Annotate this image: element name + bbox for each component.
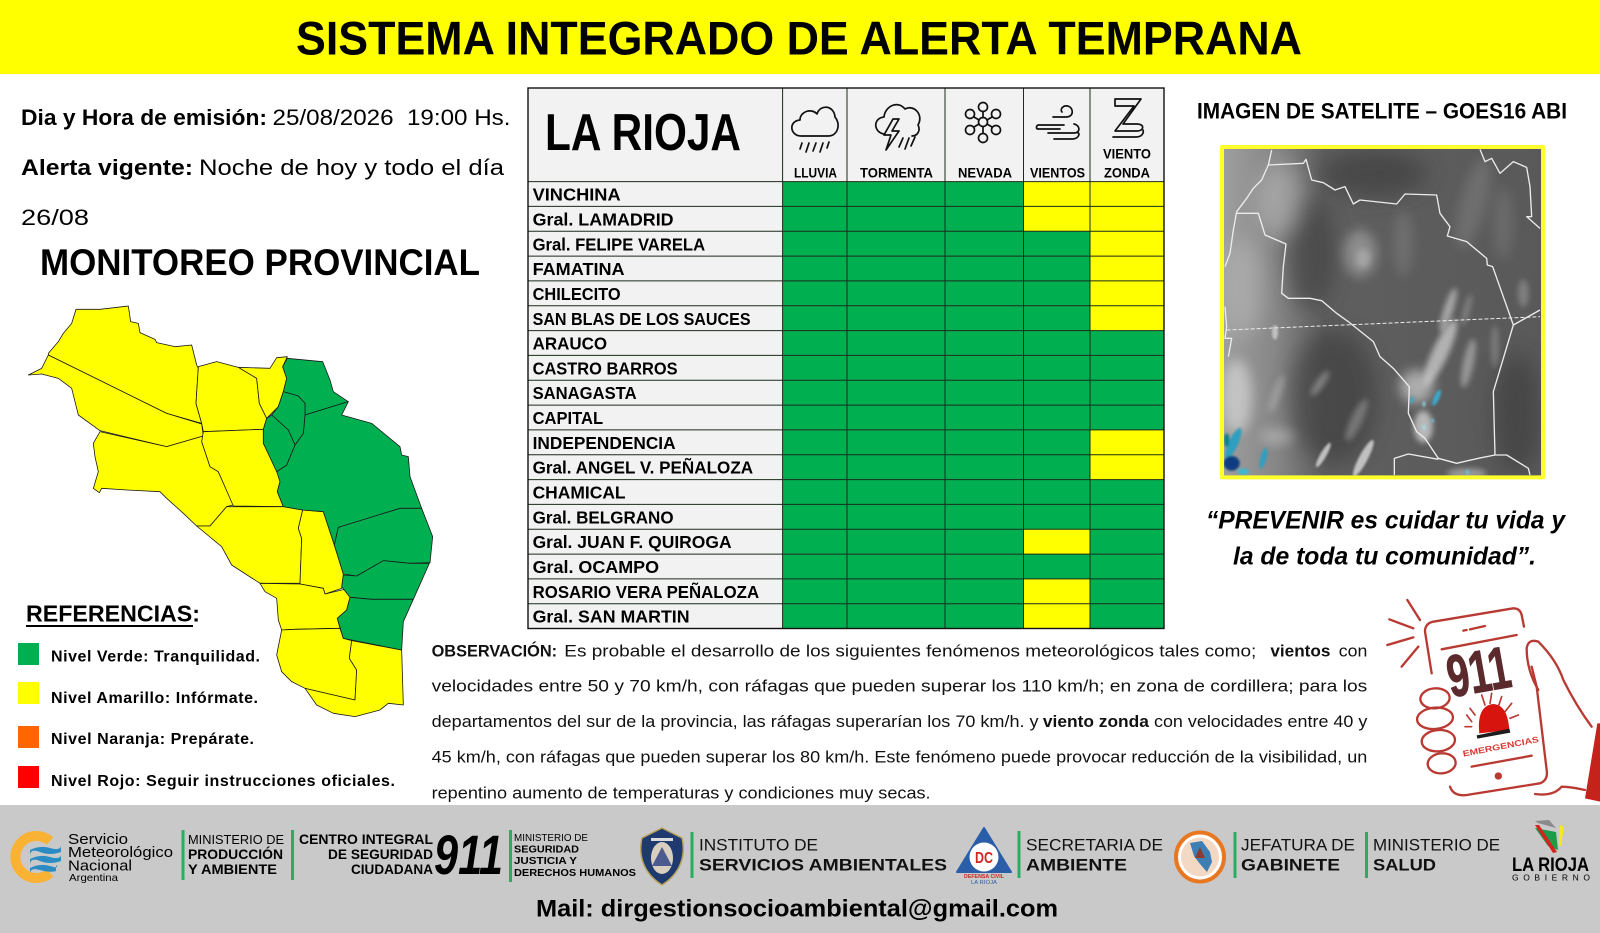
table header: ZONDA — [1104, 166, 1150, 180]
quote text: la de toda tu comunidad”. — [1233, 543, 1536, 571]
logo: ministerio de seguridad — [509, 830, 636, 882]
table header: LA RIOJA — [545, 104, 741, 162]
icon: 911 phone in hand — [1387, 600, 1600, 802]
logo: centro integral de seguridad ciudadana 911: CENTRO INTEGRAL — [299, 832, 433, 847]
row: Chamical — [528, 480, 1164, 504]
observation text: viento zonda — [1043, 713, 1150, 731]
logo: gobierno de la rioja — [1512, 820, 1590, 882]
logo: ministerio de seguridad: SEGURIDAD — [514, 844, 579, 856]
observation text: Es probable el desarrollo de los siguientes fenómenos meteorológicos tales como; — [564, 642, 1256, 660]
row: Famatina — [528, 256, 1164, 281]
row: Angel V. Peñaloza: Gral. ANGEL V. PEÑALOZA — [533, 457, 753, 478]
row: Lamadrid: Gral. LAMADRID — [533, 209, 674, 229]
icon: storm — [876, 105, 920, 150]
logo: ministerio de produccion y ambiente: PRODUCCIÓN — [188, 847, 283, 862]
icon: 911 phone in hand: 911 — [1442, 633, 1516, 710]
legend: referencias — [18, 600, 395, 790]
row: Juan F. Quiroga: Gral. JUAN F. QUIROGA — [533, 532, 732, 552]
legend: referencias: Nivel Naranja: Prepárate. — [51, 731, 254, 748]
table header: TORMENTA — [860, 166, 933, 180]
logo: defensa civil: DEFENSA CIVIL — [964, 874, 1005, 880]
legend: referencias: REFERENCIAS: — [26, 600, 200, 626]
icon: 911 phone in hand: EMERGENCIAS — [1462, 734, 1540, 759]
table header: VIENTO — [1103, 146, 1151, 162]
heading: monitoreo provincial: MONITOREO PROVINCIAL — [40, 242, 480, 283]
legend: referencias: Nivel Rojo: Seguir instrucciones oficiales. — [51, 773, 395, 790]
title banner: SISTEMA INTEGRADO DE ALERTA TEMPRANA — [296, 12, 1302, 64]
logo: servicio meteorologico nacional: Nacional — [68, 858, 132, 874]
row: Vinchina — [528, 182, 1164, 206]
legend: referencias: Nivel Verde: Tranquilidad. — [51, 648, 260, 666]
emission info text: 26/08 — [21, 205, 89, 230]
logo: secretaria de ambiente: AMBIENTE — [1026, 856, 1127, 874]
row: Independencia — [528, 430, 1164, 455]
logo: defensa civil — [957, 828, 1011, 886]
emission info text: Noche de hoy y todo el día — [199, 155, 505, 180]
icon: snowflakes — [966, 102, 1000, 142]
table header: LLUVIA — [794, 166, 837, 180]
table header: VIENTOS — [1030, 166, 1085, 180]
footer band — [0, 805, 1600, 933]
logo: centro integral de seguridad ciudadana 911: CIUDADANA — [351, 862, 433, 877]
observation text: 45 km/h, con ráfagas que pueden superar los 80 km/h. Este fenómeno puede provocar reducción de la visibilidad, un — [432, 748, 1367, 766]
row: Arauco — [528, 331, 1164, 355]
row: Sanagasta — [528, 380, 1164, 405]
row: Arauco: ARAUCO — [533, 334, 607, 354]
logo: centro integral de seguridad ciudadana 911: 911 — [434, 823, 503, 886]
row: Angel V. Peñaloza — [528, 455, 1164, 480]
table header: NEVADA — [958, 166, 1012, 180]
row: Ocampo: Gral. OCAMPO — [533, 557, 659, 577]
row: Lamadrid — [528, 206, 1164, 231]
logo: jefatura de gabinete: GABINETE — [1241, 856, 1340, 874]
logo: servicio meteorologico nacional — [15, 831, 173, 884]
logo: defensa civil: DC — [975, 850, 993, 867]
logo: servicio meteorologico nacional: Meteorológico — [68, 844, 173, 861]
logo: police shield — [641, 828, 683, 885]
row: Felipe Varela — [528, 231, 1164, 256]
row: Capital: CAPITAL — [533, 408, 603, 428]
logo: instituto de servicios ambientales: SERVICIOS AMBIENTALES — [699, 856, 947, 874]
icon: rain — [792, 107, 838, 152]
observation text: con velocidades entre 40 y — [1154, 713, 1368, 731]
row: Belgrano: Gral. BELGRANO — [533, 507, 674, 527]
row: Sanagasta: SANAGASTA — [533, 383, 637, 403]
logo: jefatura de gabinete: JEFATURA DE — [1241, 836, 1355, 854]
logo: instituto de servicios ambientales: INSTITUTO DE — [699, 836, 818, 854]
logo: centro integral de seguridad ciudadana 911: DE SEGURIDAD — [328, 847, 433, 862]
row: San Martin: Gral. SAN MARTIN — [533, 607, 690, 627]
icon: wind — [1036, 106, 1079, 139]
logo: ministerio de produccion y ambiente: Y AMBIENTE — [188, 862, 277, 877]
row: Rosario Vera Peñaloza: ROSARIO VERA PEÑALOZA — [533, 581, 759, 602]
province map — [28, 306, 433, 717]
logo: secretaria de ambiente: SECRETARIA DE — [1026, 836, 1163, 854]
row: Famatina: FAMATINA — [533, 259, 625, 279]
row: Castro Barros: CASTRO BARROS — [533, 358, 678, 378]
row: Chilecito: CHILECITO — [533, 284, 621, 304]
emission info text: 25/08/2026 19:00 Hs. — [272, 105, 510, 130]
observation text — [432, 642, 1368, 802]
observation text: velocidades entre 50 y 70 km/h, con ráfagas que pueden superar los 110 km/h; en zona de cordillera; para los — [432, 678, 1367, 696]
quote text: “PREVENIR es cuidar tu vida y — [1206, 507, 1566, 535]
alert table — [528, 88, 1164, 628]
logo: secretaria de ambiente — [1018, 831, 1163, 878]
table header — [528, 88, 1164, 182]
logo: ministerio de seguridad: JUSTICIA Y — [514, 855, 577, 867]
observation text: vientos — [1270, 642, 1330, 660]
legend: referencias: Nivel Amarillo: Infórmate. — [51, 690, 258, 707]
row: Vinchina: VINCHINA — [533, 185, 621, 205]
row: Chilecito — [528, 281, 1164, 306]
logo: ministerio de seguridad: DERECHOS HUMANOS — [514, 867, 636, 879]
emission info text: Dia y Hora de emisión: — [21, 105, 267, 130]
row: Capital — [528, 405, 1164, 430]
row: Rosario Vera Peñaloza — [528, 579, 1164, 604]
row: San Blas de los Sauces — [528, 306, 1164, 331]
logo: gobierno de la rioja: LA RIOJA — [1512, 855, 1589, 876]
row: San Blas de los Sauces: SAN BLAS DE LOS SAUCES — [533, 309, 751, 329]
logo: instituto de servicios ambientales — [690, 832, 947, 878]
logo: orange circular seal — [1176, 832, 1224, 882]
logo: ministerio de produccion y ambiente — [182, 830, 284, 880]
row: Chamical: CHAMICAL — [533, 483, 626, 503]
heading: satellite image: IMAGEN DE SATELITE – GOES16 ABI — [1197, 98, 1567, 124]
icon: zonda Z — [1113, 99, 1143, 137]
satellite image — [1220, 145, 1545, 479]
title banner — [0, 0, 1600, 74]
logo: ministerio de seguridad: MINISTERIO DE — [514, 832, 588, 844]
logo: centro integral de seguridad ciudadana 911 — [291, 823, 503, 886]
contact email: Mail: dirgestionsocioambiental@gmail.com — [536, 896, 1058, 922]
emission info text: Alerta vigente: — [21, 155, 193, 180]
observation text: OBSERVACIÓN: — [432, 642, 557, 660]
row: Belgrano — [528, 504, 1164, 529]
emission info text — [21, 105, 510, 230]
logo: defensa civil: LA RIOJA — [971, 880, 998, 886]
row: Ocampo — [528, 554, 1164, 579]
logo: servicio meteorologico nacional: Servicio — [68, 831, 128, 848]
observation text: departamentos del sur de la provincia, las ráfagas superarían los 70 km/h. y — [432, 713, 1039, 731]
logo: ministerio de salud: MINISTERIO DE — [1373, 836, 1500, 854]
logo: ministerio de salud: SALUD — [1373, 856, 1436, 874]
logo: jefatura de gabinete — [1234, 832, 1355, 878]
observation text: con — [1339, 642, 1367, 660]
logo: servicio meteorologico nacional: Argentina — [69, 872, 118, 884]
row: Independencia: INDEPENDENCIA — [533, 433, 676, 453]
row: Juan F. Quiroga — [528, 529, 1164, 554]
observation text: repentino aumento de temperaturas y condiciones muy secas. — [432, 784, 931, 802]
row: Felipe Varela: Gral. FELIPE VARELA — [533, 234, 705, 254]
logo: ministerio de salud — [1365, 832, 1500, 878]
row: Castro Barros — [528, 355, 1164, 380]
logo: ministerio de produccion y ambiente: MINISTERIO DE — [188, 832, 284, 847]
quote text — [1206, 507, 1566, 571]
logo: gobierno de la rioja: GOBIERNO — [1512, 872, 1590, 882]
row: San Martin — [528, 604, 1164, 628]
